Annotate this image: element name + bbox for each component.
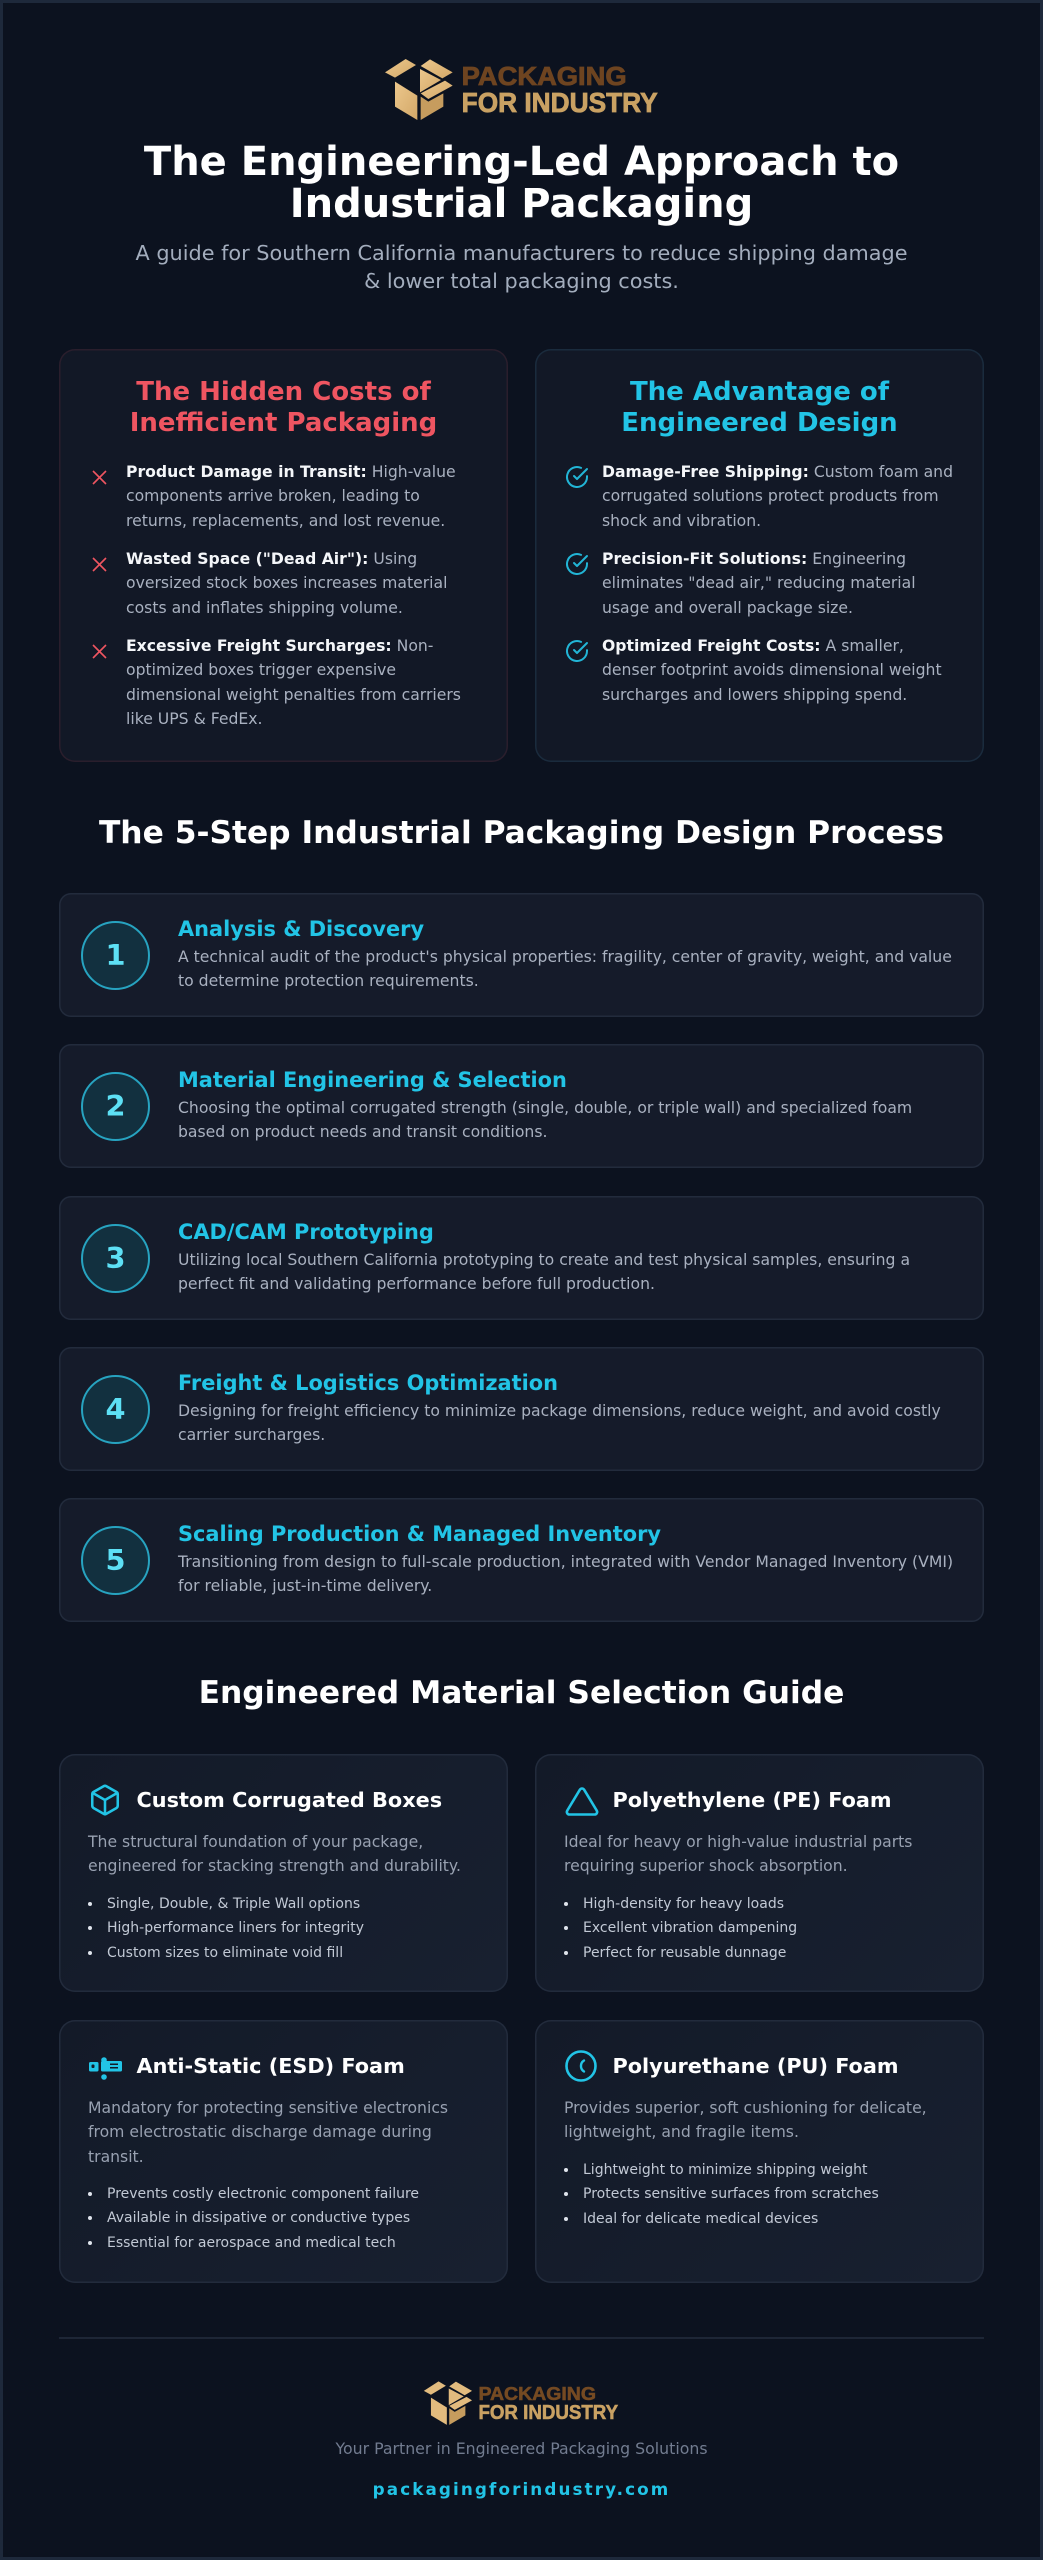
step number 2: 2 <box>105 1089 126 1123</box>
material description: requiring superior shock absorption. <box>564 1856 848 1875</box>
step number 3 <box>81 1224 150 1293</box>
list item: freight costs: surcharges and lowers shipping spend. <box>602 685 907 704</box>
material title: Polyethylene (PE) Foam <box>612 1788 892 1812</box>
step text 2: Choosing the optimal corrugated strength (single, double, or triple wall) and specialized foam <box>178 1098 912 1117</box>
list item: precision-fit: usage and overall package size. <box>602 598 853 617</box>
material bullets: Custom sizes to eliminate void fill <box>107 1945 343 1961</box>
step number 5: 5 <box>105 1543 126 1577</box>
material bullets <box>88 1896 364 1961</box>
step text 4 <box>178 1401 941 1444</box>
title <box>144 139 899 227</box>
step number 1: 1 <box>105 938 126 972</box>
heading: hidden costs: The Hidden Costs of <box>136 377 431 407</box>
heading: hidden costs <box>130 377 437 438</box>
list item: precision-fit: eliminates "dead air," reducing material <box>602 573 916 592</box>
title: The Engineering-Led Approach to <box>144 139 899 185</box>
list item: freight surcharges: dimensional weight penalties from carriers <box>126 685 461 704</box>
panel: PE foam <box>535 1754 984 1992</box>
material description <box>88 2098 448 2166</box>
icon: cross 1 <box>92 470 106 485</box>
panel: engineered advantage <box>535 349 984 762</box>
panel: ESD foam <box>59 2020 508 2283</box>
material description: Mandatory for protecting sensitive electronics <box>88 2098 448 2117</box>
list item: product damage: components arrive broken, leading to <box>126 486 420 505</box>
logo: header: PACKAGING <box>462 61 627 91</box>
step 3 <box>59 1196 984 1320</box>
logo: footer: FOR INDUSTRY <box>478 2402 618 2424</box>
step text 5: for reliable, just-in-time delivery. <box>178 1576 432 1595</box>
list item: wasted space: Wasted Space ("Dead Air"): Using <box>126 549 417 568</box>
footer tagline: Your Partner in Engineered Packaging Solutions <box>335 2439 708 2458</box>
step number 4: 4 <box>105 1392 126 1426</box>
material description: Provides superior, soft cushioning for delicate, <box>564 2098 927 2117</box>
step text 3: perfect fit and validating performance before full production. <box>178 1274 655 1293</box>
step text 1: to determine protection requirements. <box>178 971 479 990</box>
step title 4: Freight & Logistics Optimization <box>178 1371 558 1395</box>
material bullets: Single, Double, & Triple Wall options <box>107 1896 360 1912</box>
logo: header: FOR INDUSTRY <box>462 87 658 118</box>
panel: PU foam <box>535 2020 984 2283</box>
list item: freight surcharges <box>126 636 461 728</box>
list item: freight surcharges: like UPS & FedEx. <box>126 709 263 728</box>
heading: design process: The 5-Step Industrial Packaging Design Process <box>99 815 944 851</box>
step text 3: Utilizing local Southern California prototyping to create and test physical samples, ensuring a <box>178 1250 910 1269</box>
material description: engineered for stacking strength and durability. <box>88 1856 461 1875</box>
list item: freight costs <box>602 636 942 704</box>
material title: Polyurethane (PU) Foam <box>612 2054 899 2078</box>
material title: Custom Corrugated Boxes <box>136 1788 442 1812</box>
step text 5 <box>178 1552 953 1595</box>
list item: precision-fit <box>602 549 916 617</box>
material description <box>88 1832 461 1875</box>
list item: wasted space: oversized stock boxes increases material <box>126 573 447 592</box>
heading: hidden costs: Inefficient Packaging <box>130 408 437 438</box>
list item: damage-free: corrugated solutions protect products from <box>602 486 939 505</box>
step title 1: Analysis & Discovery <box>178 917 424 941</box>
subtitle: A guide for Southern California manufacturers to reduce shipping damage <box>136 241 907 265</box>
step number 4 <box>81 1375 150 1444</box>
list item: freight surcharges: Excessive Freight Surcharges: Non- <box>126 636 433 655</box>
material description: transit. <box>88 2147 144 2166</box>
material bullets <box>564 1896 797 1961</box>
material bullets: Excellent vibration dampening <box>583 1920 797 1936</box>
step number 2 <box>81 1072 150 1141</box>
material bullets: Available in dissipative or conductive types <box>107 2210 410 2226</box>
icon: PU circle <box>565 2050 597 2082</box>
material description: Ideal for heavy or high-value industrial parts <box>564 1832 912 1851</box>
footer url: packagingforindustry.com <box>373 2479 670 2499</box>
material description: from electrostatic discharge damage during <box>88 2122 432 2141</box>
logo: header <box>385 59 658 120</box>
step number 1 <box>81 921 150 990</box>
heading: engineered advantage: The Advantage of <box>630 377 889 407</box>
list item: wasted space: costs and inflates shipping volume. <box>126 598 403 617</box>
list item: damage-free <box>602 462 953 530</box>
heading: engineered advantage <box>621 377 898 438</box>
step title 5: Scaling Production & Managed Inventory <box>178 1522 661 1546</box>
icon: anti-static <box>89 2057 122 2080</box>
heading: engineered advantage: Engineered Design <box>621 408 898 438</box>
panel: hidden costs <box>59 349 508 762</box>
step number 3: 3 <box>105 1241 126 1275</box>
step text 1: A technical audit of the product's physical properties: fragility, center of gravity, weight, and value <box>178 947 952 966</box>
list item: precision-fit: Precision-Fit Solutions: Engineering <box>602 549 906 568</box>
step 4 <box>59 1347 984 1471</box>
material bullets: Lightweight to minimize shipping weight <box>583 2162 867 2178</box>
material bullets <box>88 2186 419 2251</box>
subtitle: & lower total packaging costs. <box>364 269 679 293</box>
heading: material guide: Engineered Material Selection Guide <box>199 1675 844 1711</box>
icon: triangle <box>566 1787 598 1816</box>
step text 5: Transitioning from design to full-scale production, integrated with Vendor Managed Inventory (VMI) <box>178 1552 953 1571</box>
list item: damage-free: Damage-Free Shipping: Custom foam and <box>602 462 953 481</box>
step text 4: Designing for freight efficiency to minimize package dimensions, reduce weight, and avoid costly <box>178 1401 941 1420</box>
icon: cross 3 <box>92 644 106 659</box>
step 5 <box>59 1498 984 1622</box>
material bullets: High-density for heavy loads <box>583 1896 784 1912</box>
step text 1 <box>178 947 952 990</box>
material description <box>564 2098 927 2141</box>
step text 2 <box>178 1098 912 1141</box>
logo: footer <box>424 2381 618 2425</box>
material bullets: Ideal for delicate medical devices <box>583 2211 818 2227</box>
step title 2: Material Engineering & Selection <box>178 1068 567 1092</box>
icon: check 1 <box>566 466 588 488</box>
subtitle <box>136 241 907 293</box>
material description: lightweight, and fragile items. <box>564 2122 799 2141</box>
list item: product damage <box>126 462 456 530</box>
step number 5 <box>81 1526 150 1595</box>
logo: footer: PACKAGING <box>478 2383 596 2404</box>
material bullets: Essential for aerospace and medical tech <box>107 2235 396 2251</box>
material bullets: High-performance liners for integrity <box>107 1920 364 1936</box>
panel: corrugated boxes <box>59 1754 508 1992</box>
list item: freight surcharges: optimized boxes trigger expensive <box>126 660 396 679</box>
icon: cross 2 <box>92 557 106 572</box>
step text 4: carrier surcharges. <box>178 1425 325 1444</box>
material description: The structural foundation of your package, <box>88 1832 423 1851</box>
material description <box>564 1832 912 1875</box>
material bullets: Protects sensitive surfaces from scratches <box>583 2186 879 2202</box>
step 2 <box>59 1044 984 1168</box>
step title 3: CAD/CAM Prototyping <box>178 1220 434 1244</box>
material bullets: Perfect for reusable dunnage <box>583 1945 786 1961</box>
material bullets <box>564 2162 879 2227</box>
list item: product damage: Product Damage in Transit: High-value <box>126 462 456 481</box>
material title: Anti-Static (ESD) Foam <box>136 2054 405 2078</box>
step 1 <box>59 893 984 1017</box>
icon: box <box>90 1784 120 1816</box>
step text 2: based on product needs and transit conditions. <box>178 1122 547 1141</box>
list item: freight costs: Optimized Freight Costs: A smaller, <box>602 636 904 655</box>
icon: check 2 <box>566 553 588 575</box>
list item: wasted space <box>126 549 447 617</box>
material bullets: Prevents costly electronic component failure <box>107 2186 419 2202</box>
step text 3 <box>178 1250 910 1293</box>
list item: damage-free: shock and vibration. <box>602 511 761 530</box>
list item: freight costs: denser footprint avoids dimensional weight <box>602 660 942 679</box>
title: Industrial Packaging <box>290 181 753 227</box>
list item: product damage: returns, replacements, and lost revenue. <box>126 511 445 530</box>
icon: check 3 <box>566 640 588 662</box>
